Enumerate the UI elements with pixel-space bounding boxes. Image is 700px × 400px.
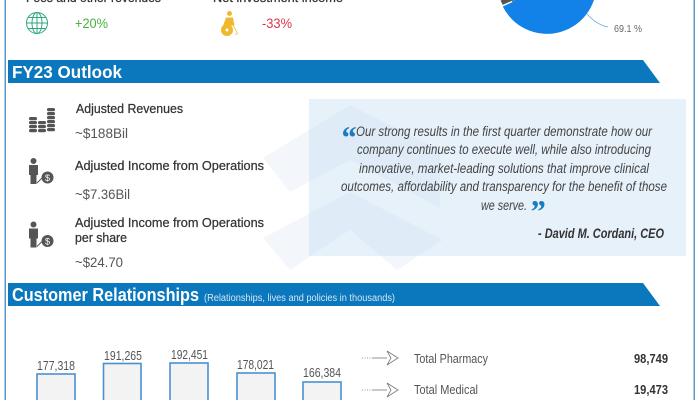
metric: fees and other revenues xyxy=(26,0,161,34)
list: customer totals: 19,473 xyxy=(634,383,668,397)
banner: FY23 Outlook xyxy=(8,60,660,83)
bar chart: 166,384 xyxy=(303,366,341,380)
quote mark: closing: ” xyxy=(529,193,545,229)
panel: outlook metrics xyxy=(29,101,264,270)
pie chart xyxy=(500,0,642,35)
arrow: pharmacy xyxy=(362,351,398,365)
list: customer totals: Total Medical xyxy=(414,383,478,397)
panel: outlook metrics: Adjusted Income from Operations xyxy=(75,215,264,230)
icon: wheelchair xyxy=(221,11,238,36)
icon: person with dollar: $ xyxy=(45,173,50,183)
arrow: medical xyxy=(362,383,398,397)
panel: outlook metrics: per share xyxy=(75,230,127,245)
quote mark: opening: “ xyxy=(340,119,356,155)
icon: person with dollar per share: $ xyxy=(45,236,50,246)
bar chart xyxy=(37,348,341,400)
panel: outlook metrics: ~$24.70 xyxy=(75,255,123,270)
panel: outlook metrics: Adjusted Revenues xyxy=(76,101,183,116)
pie chart: 69.1 % xyxy=(614,23,642,35)
watermark: hexagon logo xyxy=(263,105,443,270)
icon: person with dollar per share xyxy=(29,222,54,248)
panel: outlook metrics: Adjusted Income from Operations xyxy=(75,158,264,173)
list: customer totals xyxy=(362,351,668,397)
panel: CEO quote: Our strong results in the first quarter demonstrate how our xyxy=(356,124,652,139)
bar chart: 192,451 xyxy=(171,348,208,362)
metric: net investment income xyxy=(213,0,343,36)
banner: Customer Relationships xyxy=(8,283,660,306)
banner: Customer Relationships: (Relationships, lives and policies in thousands) xyxy=(204,293,395,304)
panel: outlook metrics: ~$7.36Bil xyxy=(75,187,130,202)
panel: CEO quote: we serve. xyxy=(481,198,527,213)
banner: Customer Relationships: Customer Relationships xyxy=(12,285,199,305)
metric: fees and other revenues: +20% xyxy=(75,15,108,31)
bar chart: 191,265 xyxy=(104,349,142,363)
panel: CEO quote: innovative, market-leading solutions that improve clinical xyxy=(359,161,650,176)
icon: person with dollar xyxy=(29,158,54,184)
icon: coin stacks xyxy=(29,108,55,132)
panel: CEO quote: company continues to execute well, while also introducing xyxy=(357,142,651,157)
leader line xyxy=(587,14,608,27)
metric: net investment income: -33% xyxy=(262,15,292,31)
list: customer totals: 98,749 xyxy=(634,352,668,366)
banner: FY23 Outlook: FY23 Outlook xyxy=(12,62,122,82)
list: customer totals: Total Pharmacy xyxy=(414,352,489,366)
panel: CEO quote xyxy=(309,99,686,256)
bar chart: 177,318 xyxy=(37,359,75,373)
panel: outlook metrics: ~$188Bil xyxy=(75,126,128,141)
bar chart: 178,021 xyxy=(237,358,274,372)
panel: CEO quote: - David M. Cordani, CEO xyxy=(538,226,664,241)
icon: globe xyxy=(26,12,48,34)
